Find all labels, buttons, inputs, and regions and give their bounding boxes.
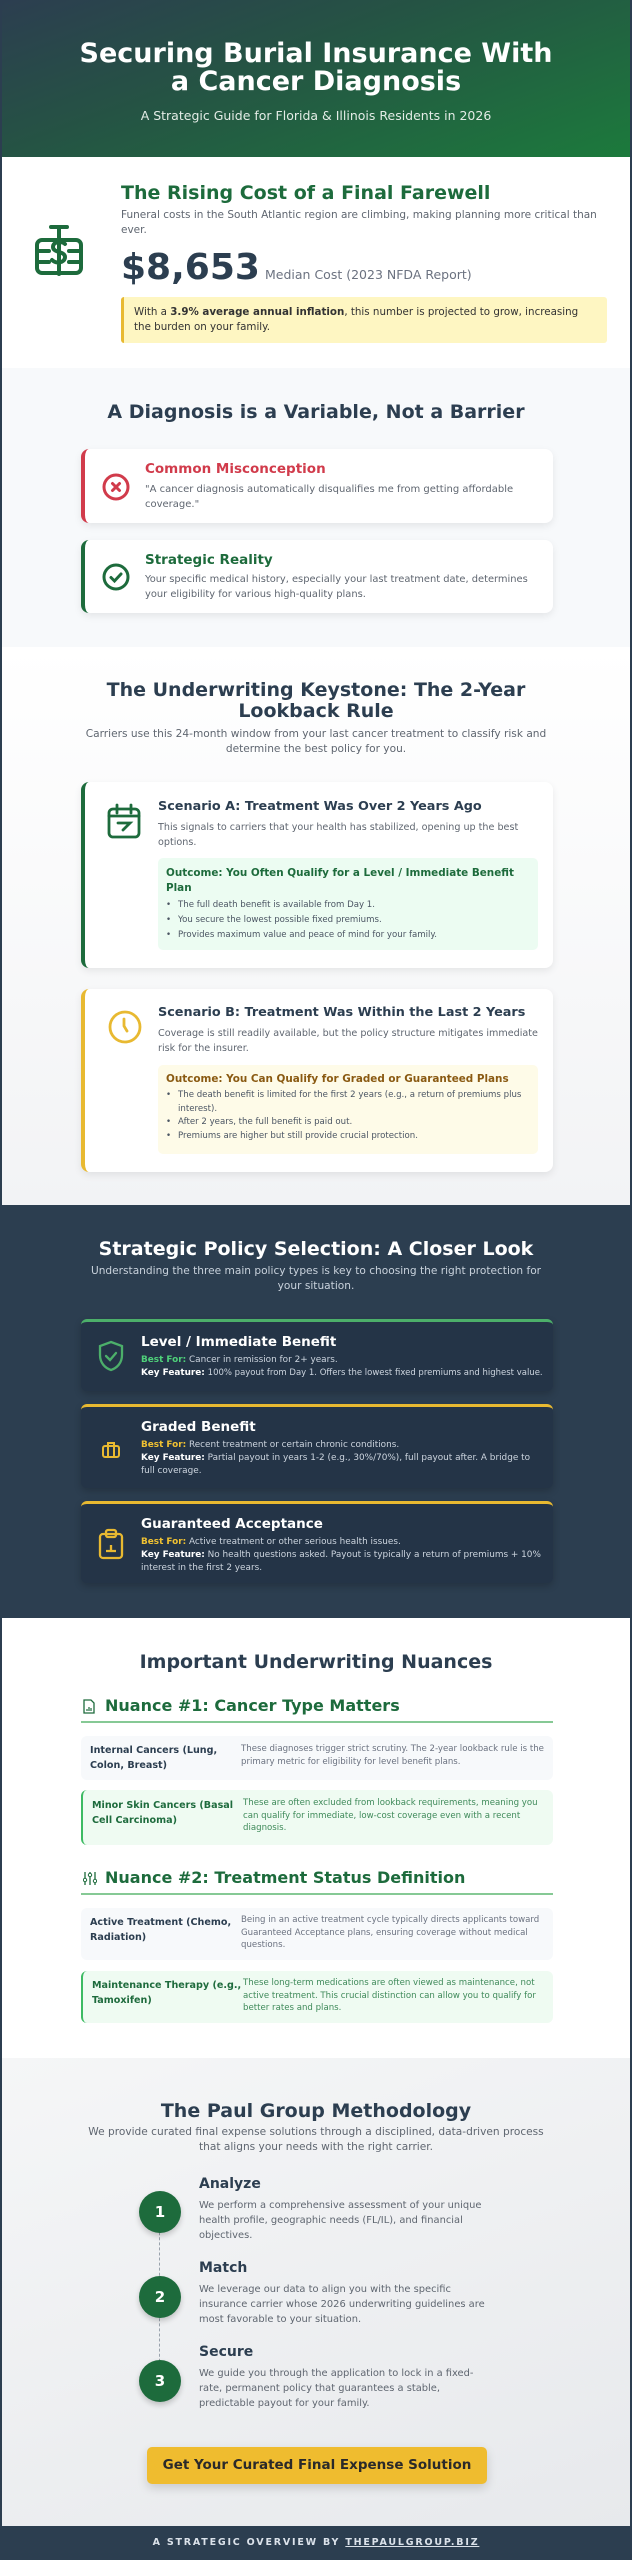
title bbox=[80, 38, 552, 97]
outcome box A: You secure the lowest possible fixed premiums. bbox=[178, 915, 382, 925]
card: strategic reality: Strategic Reality bbox=[145, 552, 273, 568]
step 1: 1 bbox=[155, 2203, 165, 2221]
panel: rising cost bbox=[2, 157, 630, 368]
heading: The Underwriting Keystone: The 2-Year Lookback Rule bbox=[107, 679, 525, 722]
CTA button bbox=[147, 2447, 487, 2484]
header banner bbox=[2, 0, 630, 157]
row: maintenance therapy: These long-term medications are often viewed as maintenance, not active treatment. This crucial distinction can allow you to qualify for better rates and plans. bbox=[243, 1978, 536, 2013]
outcome box A: The full death benefit is available from Day 1. bbox=[178, 900, 375, 910]
panel: policy selection (dark) bbox=[2, 1205, 630, 1618]
outcome box B bbox=[158, 1065, 538, 1154]
card: scenario A: This signals to carriers that your health has stabilized, opening up the best options. bbox=[158, 822, 518, 848]
icon: check circle bbox=[102, 564, 130, 590]
nuance 1 heading: Nuance #1: Cancer Type Matters bbox=[105, 1696, 400, 1715]
step 1: We perform a comprehensive assessment of your unique health profile, geographic needs (FL/IL), and financial objectives. bbox=[199, 2200, 482, 2241]
card: strategic reality: Your specific medical history, especially your last treatment date, determines your eligibility for various high-quality plans. bbox=[145, 574, 528, 600]
step 3: We guide you through the application to lock in a fixed-rate, permanent policy that guarantees a stable, predictable payout for your family. bbox=[199, 2368, 473, 2409]
row: active treatment: Being in an active treatment cycle typically directs applicants toward Guaranteed Acceptance plans, ensuring coverage without medical questions. bbox=[241, 1915, 539, 1950]
card: graded benefit: Graded Benefit bbox=[141, 1419, 256, 1435]
nuance 1 heading bbox=[81, 1696, 553, 1723]
panel: underwriting nuances bbox=[2, 1618, 630, 2058]
heading: Important Underwriting Nuances bbox=[140, 1651, 492, 1673]
row: internal cancers: These diagnoses trigger strict scrutiny. The 2-year lookback rule is the primary metric for eligibility for level benefit plans. bbox=[241, 1744, 544, 1766]
subheading: We provide curated final expense solutions through a disciplined, data-driven process that aligns your needs with the right carrier. bbox=[88, 2126, 544, 2153]
intro text: Funeral costs in the South Atlantic region are climbing, making planning more critical than ever. bbox=[121, 209, 597, 236]
icon: shield check bbox=[98, 1340, 124, 1372]
nuance 2 heading bbox=[81, 1868, 553, 1895]
card: level benefit: Best For: Cancer in remission for 2+ years. bbox=[141, 1355, 338, 1365]
CTA button: Get Your Curated Final Expense Solution bbox=[163, 2457, 471, 2473]
panel: 2-year lookback bbox=[2, 647, 630, 1205]
outcome box B: The death benefit is limited for the first 2 years (e.g., a return of premiums plus interest). bbox=[178, 1090, 521, 1114]
card: scenario A bbox=[81, 782, 553, 968]
icon: clock bbox=[108, 1010, 142, 1044]
step 2: We leverage our data to align you with the specific insurance carrier whose 2026 underwriting guidelines are most favorable to your situation. bbox=[199, 2284, 485, 2325]
outcome box A bbox=[158, 858, 538, 950]
card: graded benefit: Best For: Recent treatment or certain chronic conditions. bbox=[141, 1440, 399, 1450]
connector line bbox=[159, 2212, 160, 2382]
step 3 bbox=[136, 2344, 473, 2409]
icon: clipboard bbox=[98, 1528, 124, 1560]
card: scenario B: Coverage is still readily available, but the policy structure mitigates immediate risk for the insurer. bbox=[158, 1028, 538, 1054]
row: minor skin cancers: Minor Skin Cancers (Basal Cell Carcinoma) bbox=[92, 1800, 233, 1826]
card: guaranteed acceptance: Best For: Active treatment or other serious health issues. bbox=[141, 1537, 401, 1547]
card: level benefit: Key Feature: 100% payout from Day 1. Offers the lowest fixed premiums and highest value. bbox=[141, 1368, 543, 1378]
nuance 2 heading: Nuance #2: Treatment Status Definition bbox=[105, 1868, 465, 1887]
step 2 bbox=[136, 2260, 485, 2325]
heading: Strategic Policy Selection: A Closer Look bbox=[99, 1238, 533, 1260]
icon: dollar register bbox=[35, 225, 83, 276]
heading: The Paul Group Methodology bbox=[161, 2100, 471, 2122]
card: scenario B: Scenario B: Treatment Was Within the Last 2 Years bbox=[158, 1005, 525, 1020]
card: graded benefit: Key Feature: Partial payout in years 1-2 (e.g., 30%/70%), full payout after. A bridge to full coverage. bbox=[141, 1453, 530, 1476]
row: minor skin cancers: These are often excluded from lookback requirements, meaning you can qualify for immediate, low-cost coverage even with a recent diagnosis. bbox=[243, 1798, 538, 1833]
step 1 bbox=[136, 2176, 482, 2241]
icon: document bbox=[83, 1699, 95, 1714]
card: graded benefit bbox=[81, 1404, 553, 1488]
callout: inflation bbox=[121, 297, 607, 343]
stat: median cost: $8,653 Median Cost (2023 NFDA Report) bbox=[121, 247, 472, 288]
icon: sliders bbox=[83, 1872, 97, 1885]
card: level benefit: Level / Immediate Benefit bbox=[141, 1334, 336, 1350]
outcome box B: Premiums are higher but still provide crucial protection. bbox=[178, 1130, 418, 1140]
row: minor skin cancers bbox=[81, 1790, 553, 1845]
card: level benefit bbox=[81, 1319, 553, 1391]
title: a Cancer Diagnosis bbox=[171, 66, 461, 97]
panel: diagnosis variable bbox=[2, 368, 630, 647]
icon: calendar check bbox=[108, 804, 140, 838]
row: maintenance therapy: Maintenance Therapy (e.g., Tamoxifen) bbox=[92, 1980, 241, 2006]
subheading: Carriers use this 24-month window from your last cancer treatment to classify risk and determine the best policy for you. bbox=[86, 728, 546, 755]
outcome box B: After 2 years, the full benefit is paid out. bbox=[178, 1117, 352, 1127]
panel: methodology bbox=[2, 2058, 630, 2526]
row: active treatment bbox=[81, 1908, 553, 1960]
icon: x circle bbox=[102, 474, 130, 500]
row: internal cancers: Internal Cancers (Lung, Colon, Breast) bbox=[90, 1745, 217, 1771]
card: misconception: "A cancer diagnosis automatically disqualifies me from getting affordable coverage." bbox=[145, 484, 513, 510]
outcome box B: Outcome: You Can Qualify for Graded or Guaranteed Plans bbox=[166, 1073, 509, 1085]
title: Securing Burial Insurance With bbox=[80, 38, 552, 69]
step 2: 2 bbox=[155, 2288, 165, 2306]
card: misconception: Common Misconception bbox=[145, 461, 326, 477]
card: guaranteed acceptance: Key Feature: No health questions asked. Payout is typically a return of premiums + 10% interest in the first 2 years. bbox=[141, 1550, 541, 1573]
step 3: 3 bbox=[155, 2372, 165, 2390]
footer: A STRATEGIC OVERVIEW BY THEPAULGROUP.BIZ bbox=[153, 2537, 479, 2548]
card: guaranteed acceptance: Guaranteed Acceptance bbox=[141, 1516, 323, 1532]
heading: The Rising Cost of a Final Farewell bbox=[121, 182, 490, 204]
step 1: Analyze bbox=[199, 2176, 261, 2192]
heading: A Diagnosis is a Variable, Not a Barrier bbox=[107, 401, 525, 423]
step 3: Secure bbox=[199, 2344, 253, 2360]
step 2: Match bbox=[199, 2260, 247, 2276]
subtitle: A Strategic Guide for Florida & Illinois Residents in 2026 bbox=[141, 108, 491, 123]
outcome box A: Provides maximum value and peace of mind for your family. bbox=[178, 930, 437, 940]
card: strategic reality bbox=[81, 540, 553, 613]
subheading: Understanding the three main policy types is key to choosing the right protection for your situation. bbox=[91, 1265, 541, 1292]
row: internal cancers bbox=[81, 1736, 553, 1780]
row: maintenance therapy bbox=[81, 1971, 553, 2023]
icon: briefcase bbox=[102, 1442, 120, 1458]
card: misconception bbox=[81, 449, 553, 523]
outcome box A: Outcome: You Often Qualify for a Level / Immediate Benefit Plan bbox=[166, 867, 514, 894]
card: guaranteed acceptance bbox=[81, 1501, 553, 1583]
card: scenario B bbox=[81, 989, 553, 1172]
row: active treatment: Active Treatment (Chemo, Radiation) bbox=[90, 1917, 231, 1943]
card: scenario A: Scenario A: Treatment Was Over 2 Years Ago bbox=[158, 799, 482, 814]
callout: inflation: With a 3.9% average annual inflation, this number is projected to grow, increasing the burden on your family. bbox=[134, 306, 578, 333]
